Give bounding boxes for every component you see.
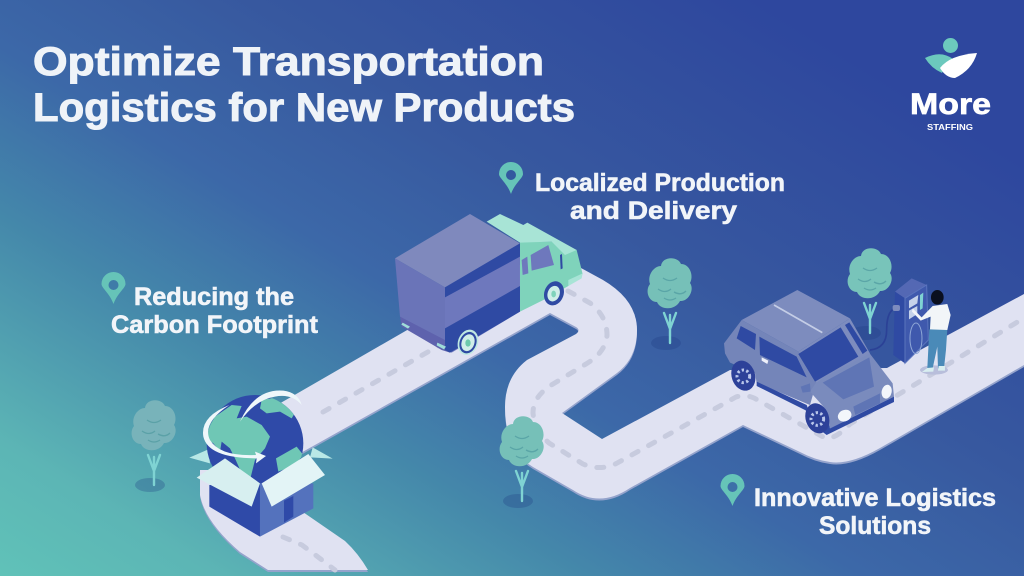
car wheels (727, 357, 759, 394)
rotation arrows (240, 391, 302, 422)
truck wheels (454, 327, 482, 358)
pin icon (102, 272, 126, 304)
label: Reducing the Carbon Footprint: Reducing the (134, 283, 294, 311)
tree: by charger (848, 248, 892, 340)
charging cable (870, 308, 895, 350)
box with globe (189, 391, 333, 537)
pin icon (720, 474, 744, 506)
globe (206, 395, 304, 484)
truck (395, 214, 583, 358)
label: Innovative Logistics Solutions: Innovative Logistics (754, 484, 996, 512)
box body (209, 483, 260, 537)
logo: More Staffing: More (910, 88, 991, 121)
label: Reducing the Carbon Footprint: Carbon Footprint (111, 311, 319, 339)
box front flaps (197, 458, 260, 507)
box back flaps (189, 447, 333, 463)
label: Innovative Logistics Solutions: Solutions (819, 512, 931, 540)
label: Localized Production and Delivery (499, 162, 785, 225)
logo: More Staffing: STAFFING (927, 123, 973, 132)
truck cab (520, 242, 583, 312)
title: Logistics for New Products (33, 86, 575, 130)
road (200, 262, 1024, 572)
label: Localized Production and Delivery: and Delivery (570, 197, 737, 225)
car body side (724, 320, 817, 405)
car headlights (836, 408, 853, 424)
charging station (893, 278, 928, 363)
title: Optimize Transportation (33, 40, 544, 84)
label: Reducing the Carbon Footprint (102, 272, 319, 339)
truck cargo box (395, 214, 520, 287)
tree: centre (648, 258, 692, 350)
tree: far left (132, 400, 176, 492)
car windows (798, 318, 870, 382)
road dashes (283, 291, 1024, 570)
label: Innovative Logistics Solutions (720, 474, 996, 540)
title (33, 40, 575, 130)
car roof (742, 290, 850, 352)
car front (810, 352, 894, 428)
tree: road bend (500, 416, 544, 508)
electric car and charging station (724, 278, 951, 437)
pin icon (499, 162, 523, 194)
label: Localized Production and Delivery: Localized Production (535, 169, 785, 197)
logo: More Staffing (910, 38, 991, 132)
person (912, 290, 951, 375)
